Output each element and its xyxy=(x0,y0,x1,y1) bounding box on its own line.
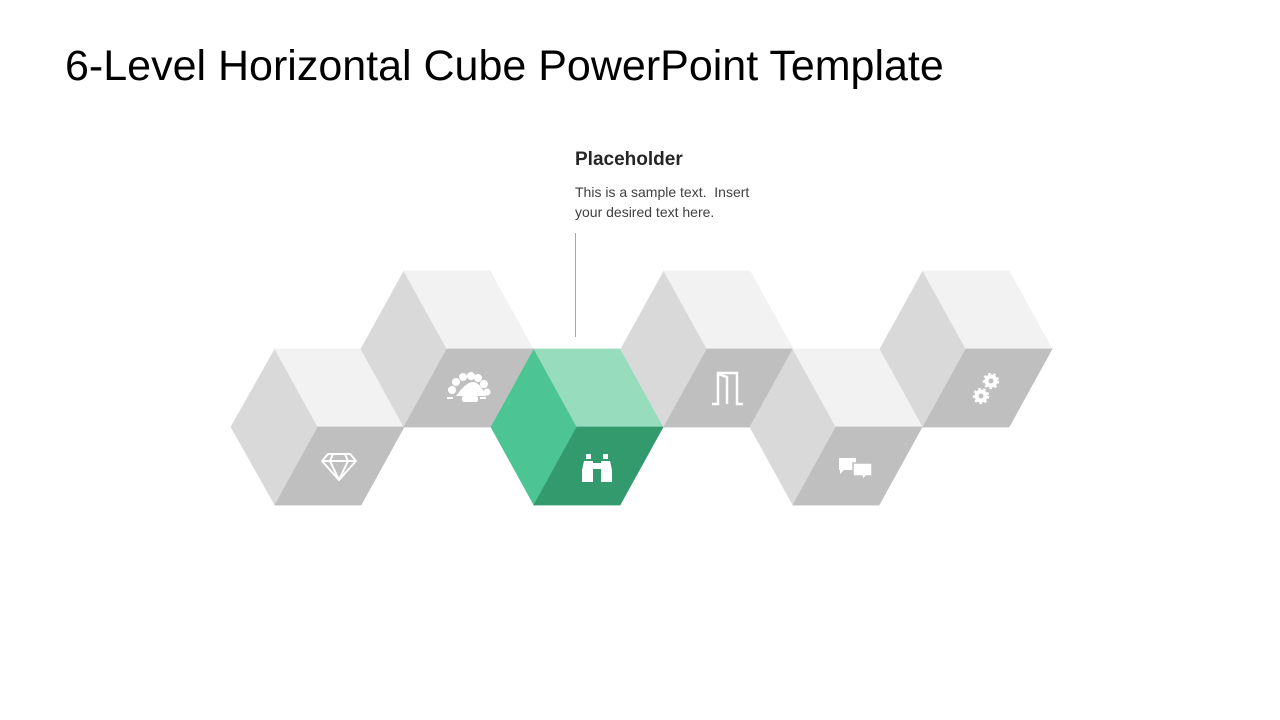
icon: door xyxy=(712,373,743,404)
title: 6-Level Horizontal Cube PowerPoint Template xyxy=(65,42,944,90)
cube 3 green highlighted xyxy=(491,349,663,505)
cube 5 xyxy=(750,349,922,505)
callout text: This is a sample text. Insert your desired text here. xyxy=(575,184,749,220)
icon: meeting table xyxy=(447,372,490,402)
cube 2 xyxy=(361,271,533,427)
cube 4 xyxy=(621,271,793,427)
callout heading: Placeholder xyxy=(575,149,683,170)
icon: binoculars xyxy=(582,454,612,482)
cube 1 xyxy=(231,349,404,505)
icon: diamond xyxy=(322,454,356,480)
icon: gears xyxy=(974,374,998,403)
connector line xyxy=(574,233,576,337)
cube 6 xyxy=(880,271,1052,427)
icon: chat bubbles xyxy=(839,458,872,480)
